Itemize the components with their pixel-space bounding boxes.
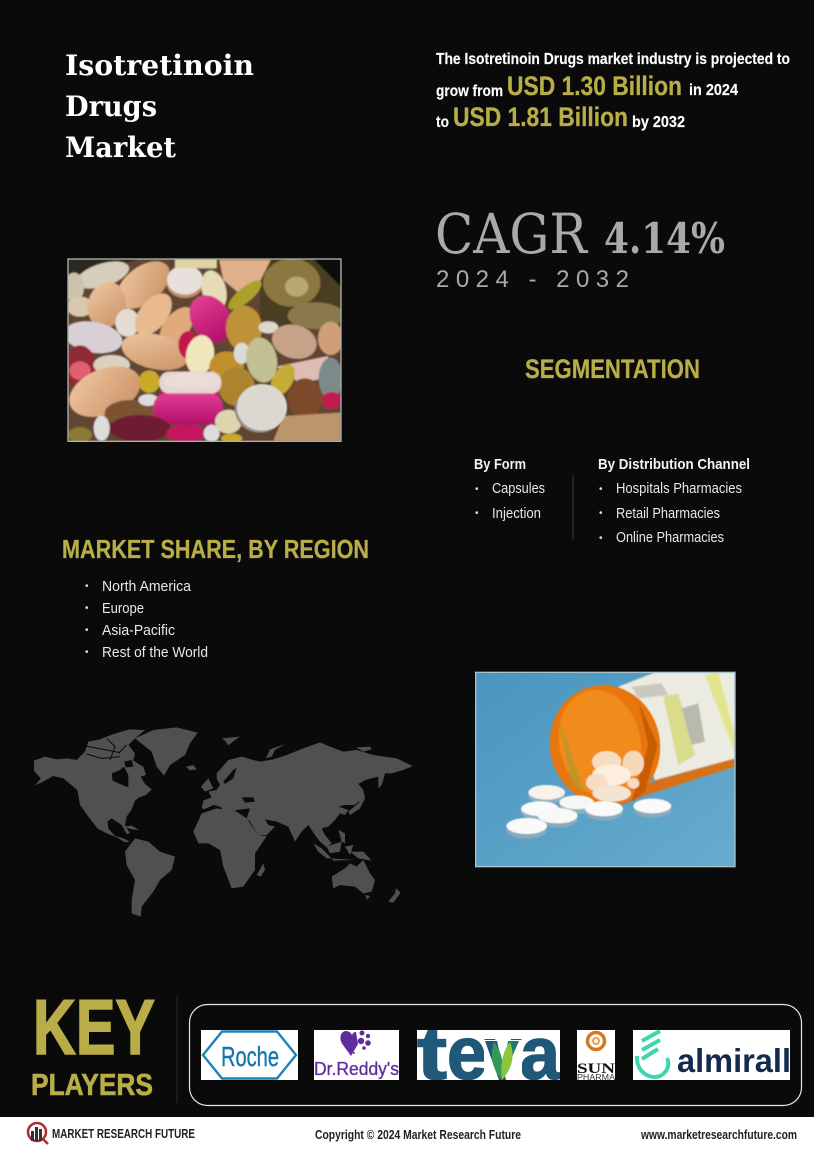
logo: Sun Pharma: SUN bbox=[577, 1061, 615, 1077]
key players panel bbox=[190, 1004, 802, 1106]
region list bbox=[85, 578, 208, 661]
title bbox=[65, 49, 254, 164]
logo: Teva: t bbox=[417, 1012, 447, 1095]
segmentation heading: SEGMENTATION bbox=[525, 354, 700, 384]
region list: • bbox=[85, 625, 89, 636]
market projection text: grow from bbox=[436, 83, 503, 100]
segment: by distribution channel: • bbox=[599, 484, 603, 495]
segment: by distribution channel: • bbox=[599, 533, 603, 544]
title: Drugs bbox=[65, 90, 157, 123]
CAGR figure: 2024 - 2032 bbox=[436, 266, 629, 293]
region list: North America bbox=[102, 578, 192, 595]
logo: Teva: v bbox=[485, 1012, 521, 1095]
segment: by form: • bbox=[475, 484, 479, 495]
segment: by form bbox=[474, 456, 545, 522]
icon: company logo bbox=[28, 1123, 48, 1144]
footer bar: Copyright © 2024 Market Research Future bbox=[315, 1127, 521, 1142]
logo: Teva: a bbox=[520, 1012, 561, 1095]
market projection text bbox=[436, 51, 790, 132]
market projection text: in 2024 bbox=[689, 82, 738, 99]
CAGR figure bbox=[435, 202, 725, 293]
logo: Dr. Reddy's: Dr.Reddy's bbox=[314, 1059, 399, 1079]
photo: spilled pill bottle bbox=[476, 672, 735, 867]
footer bar: MARKET RESEARCH FUTURE bbox=[52, 1126, 195, 1141]
logo: Roche: Roche bbox=[221, 1041, 279, 1072]
market projection text: USD 1.30 Billion bbox=[507, 71, 682, 101]
segment: by form: Injection bbox=[492, 505, 541, 522]
key players heading bbox=[31, 983, 155, 1102]
footer bar bbox=[0, 1117, 814, 1150]
logo: Teva bbox=[417, 1030, 560, 1080]
region list: • bbox=[85, 603, 89, 614]
market projection text: by 2032 bbox=[632, 114, 685, 131]
region list: Rest of the World bbox=[102, 644, 208, 661]
world map bbox=[34, 727, 413, 917]
segment: by form: Capsules bbox=[492, 480, 545, 497]
logo: Almirall: almirall bbox=[677, 1042, 791, 1079]
logo: Teva: e bbox=[447, 1012, 487, 1095]
logo: Sun Pharma bbox=[577, 1030, 616, 1082]
photo: assorted pills bbox=[62, 252, 344, 443]
segment: by distribution channel: By Distribution Channel bbox=[598, 456, 750, 473]
logo: Dr. Reddy's bbox=[314, 1030, 399, 1080]
region list: • bbox=[85, 647, 89, 658]
segment: by distribution channel bbox=[598, 456, 750, 546]
logo: Sun Pharma: PHARMA bbox=[577, 1073, 616, 1082]
title: Isotretinoin bbox=[65, 49, 254, 82]
title: Market bbox=[65, 131, 176, 164]
market share heading: MARKET SHARE, BY REGION bbox=[62, 534, 369, 564]
logo: Roche bbox=[201, 1030, 298, 1080]
key players heading: PLAYERS bbox=[31, 1067, 153, 1102]
segment: by distribution channel: Retail Pharmacies bbox=[616, 505, 720, 522]
logo: Almirall bbox=[633, 1030, 791, 1080]
CAGR figure: CAGR bbox=[435, 202, 588, 266]
market projection text: to bbox=[436, 114, 449, 131]
segment: by distribution channel: Online Pharmacies bbox=[616, 529, 724, 546]
segment: by form: • bbox=[475, 508, 479, 519]
segment: by distribution channel: • bbox=[599, 508, 603, 519]
region list: • bbox=[85, 581, 89, 592]
key players heading: KEY bbox=[33, 983, 155, 1071]
market projection text: USD 1.81 Billion bbox=[453, 102, 628, 132]
region list: Europe bbox=[102, 600, 144, 617]
segment: by distribution channel: Hospitals Pharmacies bbox=[616, 480, 742, 497]
segment: by form: By Form bbox=[474, 456, 526, 473]
CAGR figure: 4.14% bbox=[604, 214, 725, 263]
region list: Asia-Pacific bbox=[102, 622, 175, 639]
